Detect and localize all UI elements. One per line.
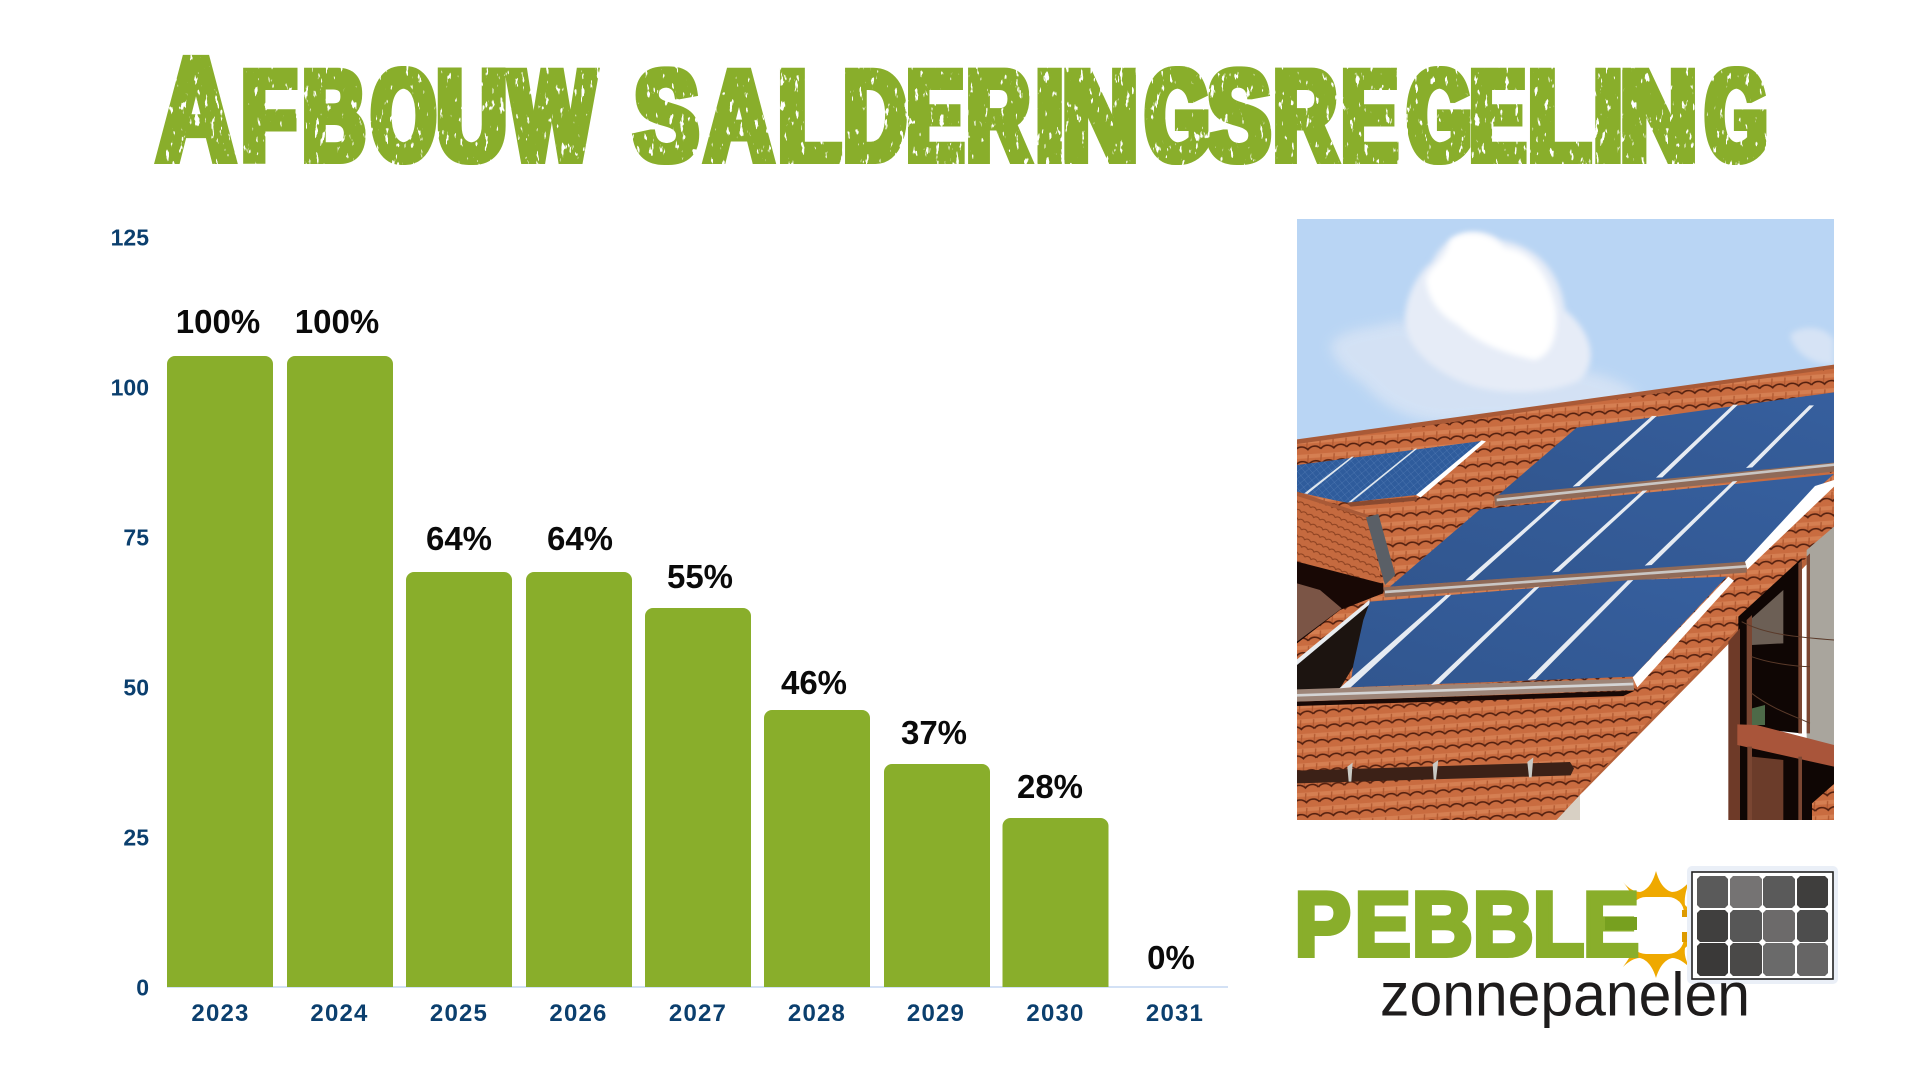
y axis labels: 0	[136, 974, 149, 1000]
year labels: 2024	[310, 1000, 369, 1027]
value labels: 100%	[176, 303, 260, 340]
bar chart	[111, 224, 1228, 1027]
year labels: 2029	[907, 1000, 965, 1027]
title: U	[437, 45, 506, 188]
title: W	[509, 45, 595, 188]
year labels: 2031	[1146, 1000, 1204, 1027]
title: A	[706, 45, 772, 188]
panel row 2	[1383, 474, 1834, 597]
title: G	[1408, 45, 1471, 188]
icon: sun	[1623, 871, 1692, 978]
year labels: 2023	[191, 1000, 250, 1027]
title: G	[1706, 45, 1767, 188]
right side building	[1557, 527, 1834, 820]
title: R	[967, 45, 1029, 188]
title: G	[1146, 45, 1209, 188]
title: S	[635, 45, 698, 188]
y axis labels: 50	[123, 674, 149, 700]
photo: solar panels on tiled roof	[1297, 219, 1834, 820]
title: D	[844, 45, 906, 188]
pipe	[1297, 757, 1574, 783]
cloud	[1330, 232, 1834, 422]
year labels	[191, 1000, 1204, 1027]
title: L	[1528, 45, 1590, 188]
title: E	[907, 45, 963, 188]
title: L	[778, 45, 840, 188]
value labels	[176, 303, 1195, 976]
wordmark zonnepanelen: zonnepanelen	[1380, 960, 1750, 1028]
panel row 1	[1494, 392, 1834, 506]
title: A	[158, 28, 234, 192]
title: I	[1036, 45, 1063, 188]
lower left dark gable and small roof	[1297, 560, 1383, 643]
y axis labels	[111, 224, 149, 1000]
year labels: 2026	[549, 1000, 608, 1027]
panel row 3	[1297, 577, 1734, 706]
year labels: 2028	[788, 1000, 846, 1027]
value labels: 55%	[667, 558, 733, 595]
value labels: 46%	[781, 664, 847, 701]
icon: solar panel	[1687, 866, 1838, 984]
value labels: 28%	[1017, 768, 1083, 805]
y axis labels: 25	[123, 824, 149, 850]
title: I	[1594, 45, 1622, 188]
logo: Pebble zonnepanelen	[1295, 866, 1838, 1028]
title	[158, 28, 1767, 192]
title: B	[303, 45, 365, 188]
title: R	[1274, 45, 1336, 188]
y axis labels: 125	[111, 224, 149, 250]
y axis labels: 100	[111, 374, 149, 400]
title: E	[1470, 45, 1525, 188]
gray flashing	[1366, 514, 1395, 585]
year labels: 2030	[1026, 1000, 1085, 1027]
year labels: 2027	[669, 1000, 727, 1027]
title: O	[372, 45, 435, 188]
title: S	[1208, 45, 1270, 188]
value labels: 0%	[1147, 939, 1195, 976]
photo contents in zoom coordinates	[1297, 365, 1834, 820]
wordmark PEBBLE: PEBBLE	[1295, 873, 1639, 975]
value labels: 100%	[295, 303, 379, 340]
title: F	[242, 45, 296, 188]
main roof	[1297, 367, 1834, 820]
value labels: 64%	[547, 520, 613, 557]
title: N	[1063, 45, 1138, 188]
small upper panels	[1297, 440, 1486, 507]
value labels: 37%	[901, 714, 967, 751]
title: N	[1620, 45, 1697, 188]
y axis labels: 75	[123, 524, 149, 550]
value labels: 64%	[426, 520, 492, 557]
bars	[167, 356, 1108, 987]
year labels: 2025	[430, 1000, 488, 1027]
title: E	[1342, 45, 1397, 188]
